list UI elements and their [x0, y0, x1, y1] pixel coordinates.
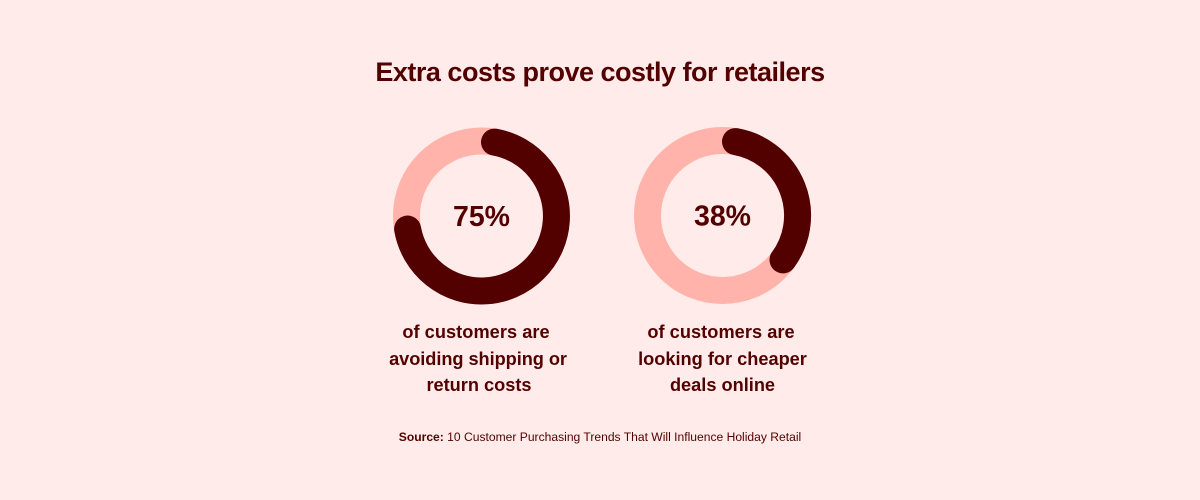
donut chart: 75%	[393, 128, 570, 304]
title: Extra costs prove costly for retailers	[375, 57, 825, 87]
caption: 75%: return costs	[426, 375, 532, 395]
caption: 38%	[638, 322, 807, 395]
caption: 75%: avoiding shipping or	[389, 348, 567, 368]
caption: 38%: deals online	[670, 375, 775, 395]
caption: 38%: of customers are	[647, 322, 795, 342]
donut chart: 38%: 38%	[694, 200, 751, 232]
caption: 75%	[389, 322, 567, 395]
donut chart: 38%	[634, 127, 812, 304]
caption: 38%: looking for cheaper	[638, 348, 807, 368]
caption: 75%: of customers are	[402, 322, 550, 342]
source: Source: 10 Customer Purchasing Trends That Will Influence Holiday Retail	[399, 430, 801, 444]
donut chart: 75%: 75%	[453, 201, 510, 233]
